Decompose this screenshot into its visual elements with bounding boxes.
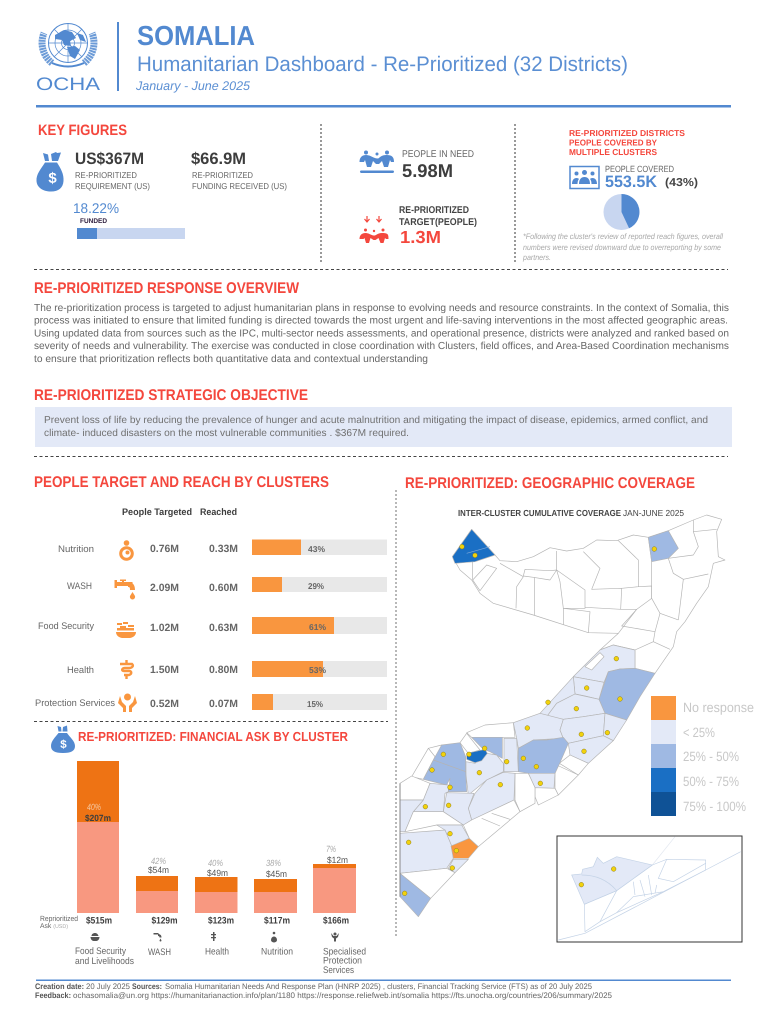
bar chart: financial ask: [40, 761, 366, 976]
footnote: partners.: [522, 253, 551, 262]
figure: funding received: $66.9M: [191, 150, 246, 168]
heading: multiple clusters: RE-PRIORITIZED DISTRICTS: [569, 128, 685, 138]
bars: [77, 761, 356, 913]
funding labels: $54m: [148, 865, 169, 875]
text block: overview paragraph: severity of needs and vulnerability. The exercise was conducted in close coordination with Clusters, field offices, and Area-Based Coordination mechanisms: [34, 341, 729, 352]
section: response overview: [34, 280, 729, 365]
totals: [86, 916, 349, 926]
icon: people covered: [570, 166, 599, 188]
footer: sources: [35, 982, 613, 1000]
row: health: Health: [67, 665, 94, 676]
text block: overview paragraph: Using updated data from sources such as the IPC, multi-sector needs assessments, and operational presence, districts were analyzed and ranked based on: [34, 328, 729, 340]
text block: overview paragraph: to ensure that prioritization reflects both quantitative data and contextual understanding: [34, 354, 428, 365]
dashed dividers: [321, 124, 515, 263]
panel: multi-cluster coverage: [522, 128, 723, 262]
footer: sources: Creation date:: [35, 982, 84, 991]
footer: sources: ochasomalia@un.org https://humanitarianaction.info/plan/1180 https://response.reliefweb.int/somalia https://fts.unocha.org/countries/206/summary/2025: [73, 991, 613, 1000]
heading: key figures: KEY FIGURES: [38, 122, 127, 139]
table headers: People Targeted: [122, 507, 192, 518]
axis caption: Reprioritized: [40, 914, 78, 923]
bar: 53%: 53%: [309, 665, 326, 675]
small cluster icons: [90, 932, 339, 942]
bar: 53%: [252, 661, 387, 677]
funding labels: 38%: [266, 858, 281, 868]
row: protection services: 0.52M: [150, 698, 179, 710]
icon: nutrition: [121, 540, 132, 559]
title: January - June 2025: [135, 79, 250, 93]
icon: money bag small: $: [60, 739, 67, 751]
bar: 61%: [252, 617, 387, 634]
table headers: Reached: [200, 507, 237, 518]
row: food security: 0.63M: [209, 622, 238, 634]
row: protection services: 0.07M: [209, 698, 238, 710]
funding labels: 40%: [208, 858, 223, 868]
row: nutrition: [58, 540, 387, 559]
figure: people covered: [605, 164, 698, 191]
bar: 61%: 61%: [309, 622, 326, 632]
row: nutrition: 0.33M: [209, 543, 238, 555]
totals: $166m: [323, 916, 349, 926]
row: food security: Food Security: [38, 621, 94, 632]
callout: objective: [35, 407, 732, 447]
footer: sources: 20 July 2025: [86, 982, 131, 991]
pie chart: 43% covered: [604, 194, 640, 230]
heading: geographic coverage: RE-PRIORITIZED: GEOGRAPHIC COVERAGE: [405, 475, 695, 492]
row: nutrition: Nutrition: [58, 544, 94, 555]
icon: food bowl: [116, 622, 136, 638]
heading: multiple clusters: [569, 128, 685, 157]
funding labels: 40%: [87, 802, 101, 812]
row: wash: [67, 577, 387, 600]
footnote: *Following the cluster's review of reported reach figures, overall: [523, 232, 723, 241]
row: wash: WASH: [67, 581, 92, 592]
logo: OCHA emblem: [36, 24, 100, 94]
title: SOMALIA: [137, 20, 255, 51]
funding labels: 7%: [326, 844, 336, 854]
axis caption: [40, 914, 78, 930]
funded progress bar: 18.22%: [73, 200, 119, 216]
map: southern districts: [400, 713, 627, 917]
map legend: < 25%: [683, 725, 715, 740]
bar: 43%: [252, 540, 387, 555]
heading: multiple clusters: MULTIPLE CLUSTERS: [569, 147, 657, 157]
panel: geographic coverage: [400, 475, 754, 942]
funding labels: $49m: [207, 868, 228, 878]
funding labels: $12m: [327, 855, 348, 865]
heading: multiple clusters: PEOPLE COVERED BY: [569, 138, 657, 148]
figure: people covered: PEOPLE COVERED: [605, 164, 674, 174]
totals: $117m: [264, 916, 290, 926]
map title: JAN-JUNE 2025: [623, 508, 684, 518]
map legend: 75% - 100%: [683, 799, 746, 814]
row: wash: 2.09M: [150, 582, 179, 594]
map: northern districts: [452, 515, 725, 720]
figure: requirement: REQUIREMENT (US): [75, 181, 150, 191]
title: [135, 20, 628, 93]
cluster labels: Nutrition: [261, 946, 293, 958]
icon: target people: [360, 216, 388, 243]
cluster labels: WASH: [148, 947, 171, 958]
text block: overview paragraph: [34, 303, 729, 365]
figure: people in need: 5.98M: [402, 160, 453, 181]
icon: health staff: [120, 660, 133, 679]
callout: objective: climate- induced disasters on the most vulnerable communities . $367M required.: [44, 428, 409, 439]
text block: overview paragraph: process was initiated to ensure that limited funding is directed towards the most urgent and life-saving interventions in the most affected geographic areas.: [34, 316, 728, 326]
figure: re-prioritized target: 1.3M: [400, 227, 441, 247]
bar: 43%: 43%: [308, 544, 325, 554]
figure: people in need: [402, 149, 474, 181]
map title: INTER-CLUSTER CUMULATIVE COVERAGE: [458, 508, 621, 518]
funded progress bar: [73, 200, 185, 239]
icon: water tap: [114, 580, 135, 600]
row: food security: 1.02M: [150, 622, 179, 634]
panel: key figures: [36, 122, 287, 239]
map inset: Banadir: [557, 836, 742, 942]
row: wash: 0.60M: [209, 582, 238, 594]
figure: requirement: RE-PRIORITIZED: [75, 170, 137, 180]
map legend: 25% - 50%: [683, 749, 739, 764]
callout: objective: Prevent loss of life by reducing the prevalence of hunger and acute malnutrition and mitigating the impact of disease, epidemics, armed conflict, and: [44, 415, 708, 426]
figure: funding received: RE-PRIORITIZED: [192, 170, 253, 180]
map legend: No response: [683, 700, 754, 715]
bar: 15%: [252, 694, 387, 710]
logo: OCHA emblem: OCHA: [36, 74, 100, 94]
footer: sources: Feedback:: [35, 991, 71, 1000]
row: health: 0.80M: [209, 664, 238, 676]
row: health: 1.50M: [150, 664, 179, 676]
map: site markers: [402, 544, 657, 896]
figure: people covered: (43%): [665, 177, 698, 189]
icon: money bag small: [51, 726, 75, 753]
funding labels: [85, 802, 348, 879]
figure: requirement: US$367M: [75, 150, 144, 168]
cluster labels: Specialised: [323, 946, 366, 958]
cluster labels: Health: [205, 946, 229, 958]
figure: funding received: FUNDING RECEIVED (US): [192, 181, 287, 191]
bar: 15%: 15%: [307, 699, 323, 709]
footnote: [522, 232, 723, 262]
footer: sources: Somalia Humanitarian Needs And Response Plan (HNRP 2025) , clusters, Financial Tracking Service (FTS) as of 20 July 2025: [165, 982, 593, 991]
section: strategic objective: [34, 387, 732, 447]
icon: protection hands: [118, 694, 137, 712]
footnote: numbers were revised downward due to overreporting by some: [523, 243, 721, 252]
figure: re-prioritized target: [399, 205, 477, 247]
row: food security: [38, 617, 387, 638]
figure: requirement: [75, 150, 150, 191]
figure: people in need: PEOPLE IN NEED: [402, 149, 474, 160]
axis caption: Ask (USD): [40, 922, 68, 930]
figure: people covered: 553.5K: [605, 173, 657, 191]
funding labels: $207m: [85, 813, 111, 823]
totals: $129m: [152, 916, 178, 926]
map legend: 50% - 75%: [683, 774, 739, 789]
heading: strategic objective: RE-PRIORITIZED STRATEGIC OBJECTIVE: [34, 387, 308, 404]
funding labels: $45m: [266, 869, 287, 879]
panel: financial ask: [40, 726, 366, 976]
table headers: [122, 507, 237, 518]
figure: funding received: [191, 150, 287, 191]
heading: people target: PEOPLE TARGET AND REACH BY CLUSTERS: [34, 474, 329, 491]
funded progress bar: FUNDED: [80, 218, 107, 225]
cluster labels: Protection: [323, 956, 362, 966]
figure: re-prioritized target: TARGET(PEOPLE): [399, 217, 477, 228]
bar: 29%: 29%: [308, 581, 324, 591]
cluster labels: [75, 946, 366, 976]
map legend: [651, 696, 754, 816]
row: nutrition: 0.76M: [150, 543, 179, 555]
header divider: [117, 22, 119, 91]
icon: money bag: [36, 152, 64, 192]
cluster labels: and Livelihoods: [75, 956, 134, 967]
title: Humanitarian Dashboard - Re-Prioritized (32 Districts): [137, 53, 628, 76]
cluster labels: Services: [323, 965, 354, 976]
footer: sources: Sources:: [132, 982, 162, 991]
row: protection services: [35, 694, 387, 712]
text block: overview paragraph: The re-prioritization process is targeted to adjust humanitarian plans in response to evolving needs and resource constraints. In the context of Somalia, this: [34, 303, 729, 314]
bar: 29%: [252, 577, 387, 592]
panel: people target and reach: [34, 474, 387, 712]
funding labels: 42%: [151, 856, 166, 866]
totals: $515m: [86, 916, 112, 926]
icon: money bag: $: [48, 170, 57, 187]
panel: people figures: [360, 149, 477, 247]
row: protection services: Protection Services: [35, 698, 115, 709]
heading: financial ask: RE-PRIORITIZED: FINANCIAL ASK BY CLUSTER: [78, 729, 349, 744]
figure: re-prioritized target: RE-PRIORITIZED: [399, 205, 469, 216]
heading: response overview: RE-PRIORITIZED RESPONSE OVERVIEW: [34, 280, 299, 297]
icon: people in need: [360, 150, 394, 173]
cluster labels: Food Security: [75, 946, 126, 957]
totals: $123m: [208, 916, 234, 926]
row: health: [67, 660, 387, 679]
